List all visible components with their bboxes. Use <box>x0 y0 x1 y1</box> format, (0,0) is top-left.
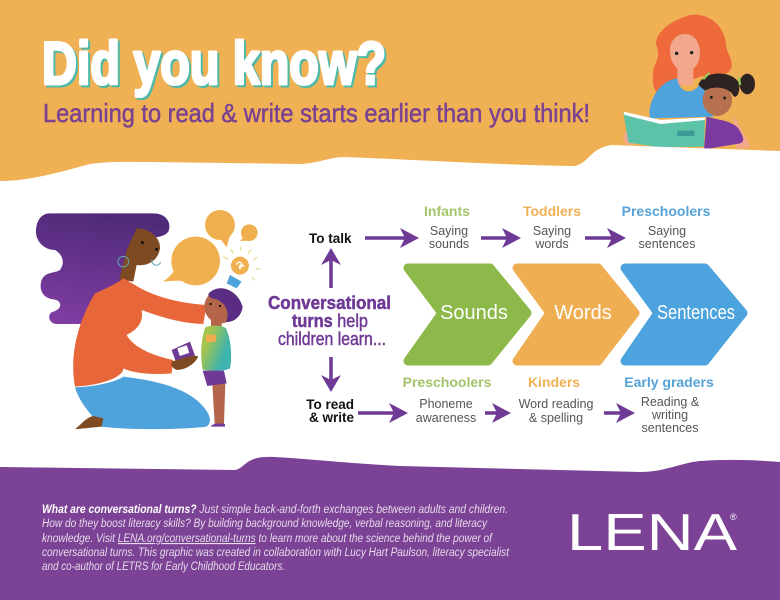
arrow: down to read and write <box>321 357 341 392</box>
chevron: sounds <box>408 268 527 361</box>
text: saying sentences: Saying <box>648 224 686 238</box>
woman face and neck <box>119 228 160 282</box>
woman hair <box>36 213 169 324</box>
speech bubble small <box>240 224 258 241</box>
text: saying sounds: sounds <box>429 237 469 251</box>
arrow <box>604 403 635 423</box>
logo: LENA: ® <box>730 512 737 522</box>
open book <box>623 112 705 147</box>
woman foot <box>75 416 103 429</box>
illustration: mother reading a book with child <box>623 15 755 149</box>
label: to read and write: To read <box>306 397 354 412</box>
woman skirt <box>75 377 210 429</box>
text: conversational turns help children learn: turns help <box>292 310 368 331</box>
child body <box>704 117 743 149</box>
text: saying sentences: sentences <box>639 237 695 251</box>
text: reading and writing sentences: writing <box>651 408 688 422</box>
child shorts <box>203 371 227 386</box>
text: phoneme awareness: Phoneme <box>419 397 473 411</box>
label: kinders: Kinders <box>528 374 580 390</box>
child shirt <box>201 326 231 371</box>
arrow <box>585 228 626 248</box>
arrow <box>365 228 419 248</box>
label: to read and write <box>306 397 354 425</box>
child hair <box>208 288 243 322</box>
panel: purple footer <box>0 457 780 600</box>
text: saying words: words <box>534 237 569 251</box>
row: to talk <box>309 203 711 251</box>
arrow: up to talk <box>321 248 341 288</box>
subtitle: Learning to read & write starts earlier than you think! <box>43 98 590 128</box>
text: phoneme awareness: awareness <box>416 411 476 425</box>
child hair tail <box>740 74 755 94</box>
mother neck and face <box>670 34 700 85</box>
label: to read and write: & write <box>309 410 354 425</box>
illustration: woman talking with child <box>36 210 260 429</box>
text: saying words: Saying <box>533 224 571 238</box>
text: footer explanation: conversational turns. This graphic was created in collaboration with Lucy Hart Paulson, literacy specialist <box>42 547 510 559</box>
row: to read and write <box>306 374 714 435</box>
child neck and head <box>211 317 222 330</box>
label: preschoolers: Preschoolers <box>622 203 711 219</box>
speech bubble large <box>163 237 220 285</box>
text: footer explanation: How do they boost literacy skills? By building background knowledge, verbal reasoning, and literacy <box>42 518 488 530</box>
text: footer explanation: What are conversational turns? Just simple back-and-forth exchanges between adults and children. <box>42 504 508 516</box>
arrow <box>481 228 521 248</box>
speech bubble medium <box>205 210 235 247</box>
child head <box>703 84 732 116</box>
text: footer explanation: and co-author of LETRS for Early Childhood Educators. <box>42 561 285 573</box>
mother hair <box>653 15 732 94</box>
chevron: sentences <box>625 268 743 361</box>
earrings <box>118 256 129 267</box>
text: conversational turns help children learn: children learn... <box>278 328 386 349</box>
text: conversational turns help children learn <box>268 292 391 349</box>
text: reading and writing sentences: sentences <box>642 421 698 435</box>
arrow <box>485 403 511 423</box>
chevron: sounds: Sounds <box>440 302 508 324</box>
text: word reading and spelling: Word reading <box>519 397 593 411</box>
mother hand <box>623 130 638 145</box>
panel: orange header background <box>0 0 780 200</box>
chevron: sentences: Sentences <box>657 302 735 324</box>
arrow <box>358 403 408 423</box>
label: toddlers: Toddlers <box>523 203 581 219</box>
label: early graders: Early graders <box>624 374 714 390</box>
text: footer explanation <box>42 504 510 573</box>
child legs <box>212 383 225 424</box>
panel: white middle band <box>0 145 780 480</box>
block toy in hand <box>171 342 198 370</box>
title: Did you know? <box>42 30 386 97</box>
chevron: words: Words <box>554 302 612 324</box>
text: saying sounds: Saying <box>430 224 468 238</box>
logo: LENA: LENA <box>567 504 737 562</box>
mother shirt <box>649 78 713 118</box>
text: word reading and spelling: & spelling <box>529 411 583 425</box>
label: infants: Infants <box>424 203 470 219</box>
text: conversational turns help children learn: Conversational <box>268 292 391 313</box>
mother arm <box>733 115 751 149</box>
label: to talk: To talk <box>309 231 352 246</box>
label: preschoolers: Preschoolers <box>403 374 492 390</box>
woman top <box>73 278 207 387</box>
light bulb <box>223 247 260 288</box>
text: reading and writing sentences: Reading & <box>641 395 699 409</box>
chevron: words <box>517 268 635 361</box>
text: footer explanation: knowledge. Visit LENA.org/conversational-turns to learn more about the science behind the power of <box>42 533 494 545</box>
